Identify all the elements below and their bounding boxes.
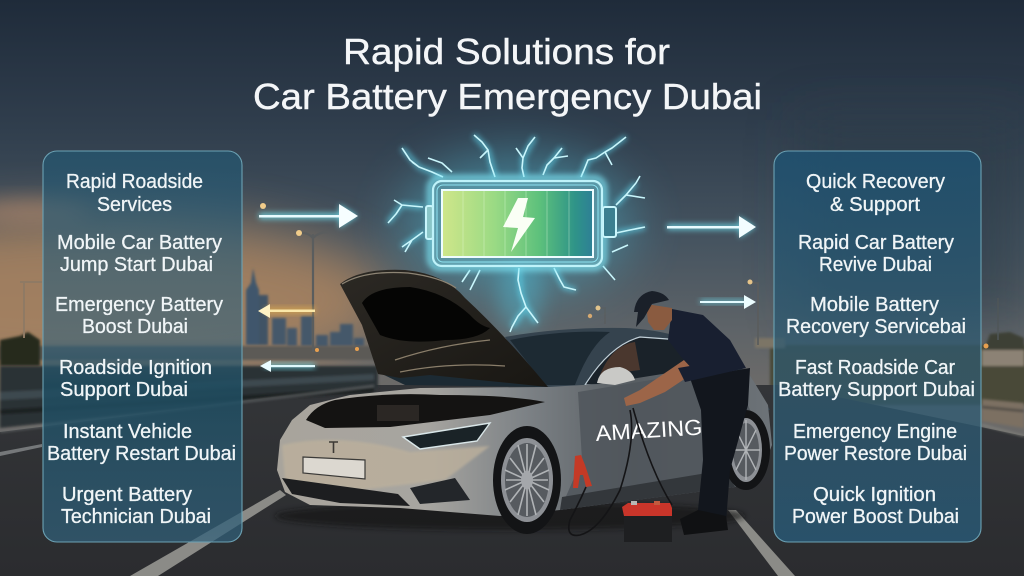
right item 2: Revive Dubai <box>819 254 932 276</box>
right item 4: Battery Support Dubai <box>778 379 975 401</box>
background: left trees <box>0 332 40 366</box>
right item 2 <box>798 232 954 276</box>
technician boots <box>680 510 728 535</box>
guardrail right <box>982 399 1024 436</box>
car front wheel <box>493 426 561 534</box>
car body <box>277 368 772 516</box>
technician arm <box>624 360 695 406</box>
right item 5: Power Restore Dubai <box>784 443 967 465</box>
icon: glowing battery <box>426 178 616 268</box>
car roof and windows <box>380 328 770 410</box>
car lower grille <box>282 478 410 506</box>
road <box>0 385 1024 576</box>
lightning around battery <box>388 135 645 333</box>
technician head <box>646 304 672 330</box>
car shadow <box>275 502 745 530</box>
right item 2: Rapid Car Battery <box>798 232 954 254</box>
background: right buildings and grass <box>755 332 1024 405</box>
technician cap <box>634 291 669 327</box>
battery outer casing <box>433 181 602 266</box>
title: Car Battery Emergency Dubai <box>253 76 762 117</box>
background: distant city skyline <box>246 268 364 347</box>
left item 6: Technician Dubai <box>61 506 211 528</box>
technician legs <box>681 368 750 530</box>
right item 5: Emergency Engine <box>793 421 957 443</box>
portable car battery <box>622 501 672 542</box>
car number plate <box>303 457 365 479</box>
car rear wheel <box>722 410 770 490</box>
icon: lightning bolt <box>503 198 535 252</box>
arrow: top right <box>667 216 756 238</box>
road lane markings <box>0 444 795 576</box>
panel: left services <box>43 151 242 542</box>
left item 2: Jump Start Dubai <box>60 254 213 276</box>
red jumper clamp <box>573 455 592 488</box>
left item 3: Emergency Battery <box>55 294 223 316</box>
left item 5: Battery Restart Dubai <box>47 443 236 465</box>
car headlight <box>403 423 490 449</box>
left item 2 <box>57 232 222 276</box>
right item 6 <box>792 484 959 528</box>
car lower sill <box>560 470 735 510</box>
left item 6 <box>61 484 211 528</box>
guardrail left <box>0 366 378 432</box>
left item 4: Roadside Ignition <box>59 357 212 379</box>
left item 5: Instant Vehicle <box>63 421 192 443</box>
left item 4: Support Dubai <box>60 379 188 401</box>
car front bumper highlight <box>282 440 490 490</box>
car side mirror <box>597 367 635 385</box>
battery in engine bay <box>377 405 419 421</box>
left item 3 <box>55 294 223 338</box>
right item 1: & Support <box>830 194 920 216</box>
technician <box>624 291 750 535</box>
battery terminals <box>426 206 616 239</box>
car brand wordmark: AMAZING <box>595 415 703 446</box>
left item 4 <box>59 357 212 401</box>
right item 1 <box>806 171 945 216</box>
car emblem <box>329 442 338 453</box>
car engine bay <box>306 394 545 428</box>
right item 3 <box>786 294 966 338</box>
title <box>253 31 762 117</box>
right item 3: Mobile Battery <box>810 294 939 316</box>
panel: right services <box>774 151 981 542</box>
car door panel shading <box>560 372 765 510</box>
arrow: lower left cyan <box>260 360 315 372</box>
left item 3: Boost Dubai <box>82 316 188 338</box>
right item 4 <box>778 357 975 401</box>
car illustration <box>275 328 772 534</box>
right item 6: Quick Ignition <box>813 484 936 506</box>
arrow: lower right <box>700 295 756 309</box>
arrow: top left <box>259 204 358 228</box>
right item 5 <box>784 421 967 465</box>
left item 6: Urgent Battery <box>62 484 192 506</box>
right item 1: Quick Recovery <box>806 171 945 193</box>
title: Rapid Solutions for <box>343 31 670 72</box>
right item 3: Recovery Servicebai <box>786 316 966 338</box>
car lower side vent <box>410 478 470 504</box>
right item 4: Fast Roadside Car <box>795 357 955 379</box>
arrow: amber left <box>258 304 315 318</box>
open car hood <box>340 270 548 387</box>
left item 5 <box>47 421 236 465</box>
left item 2: Mobile Car Battery <box>57 232 222 254</box>
background: overpass band <box>0 346 380 360</box>
street lamps <box>20 203 998 352</box>
left item 1: Rapid Roadside <box>66 171 203 193</box>
right item 6: Power Boost Dubai <box>792 506 959 528</box>
left item 1 <box>66 171 203 216</box>
jumper cables <box>569 408 672 535</box>
battery charge cells <box>442 190 593 257</box>
left item 1: Services <box>97 194 172 216</box>
battery glow <box>430 178 604 268</box>
technician shirt <box>668 309 746 382</box>
